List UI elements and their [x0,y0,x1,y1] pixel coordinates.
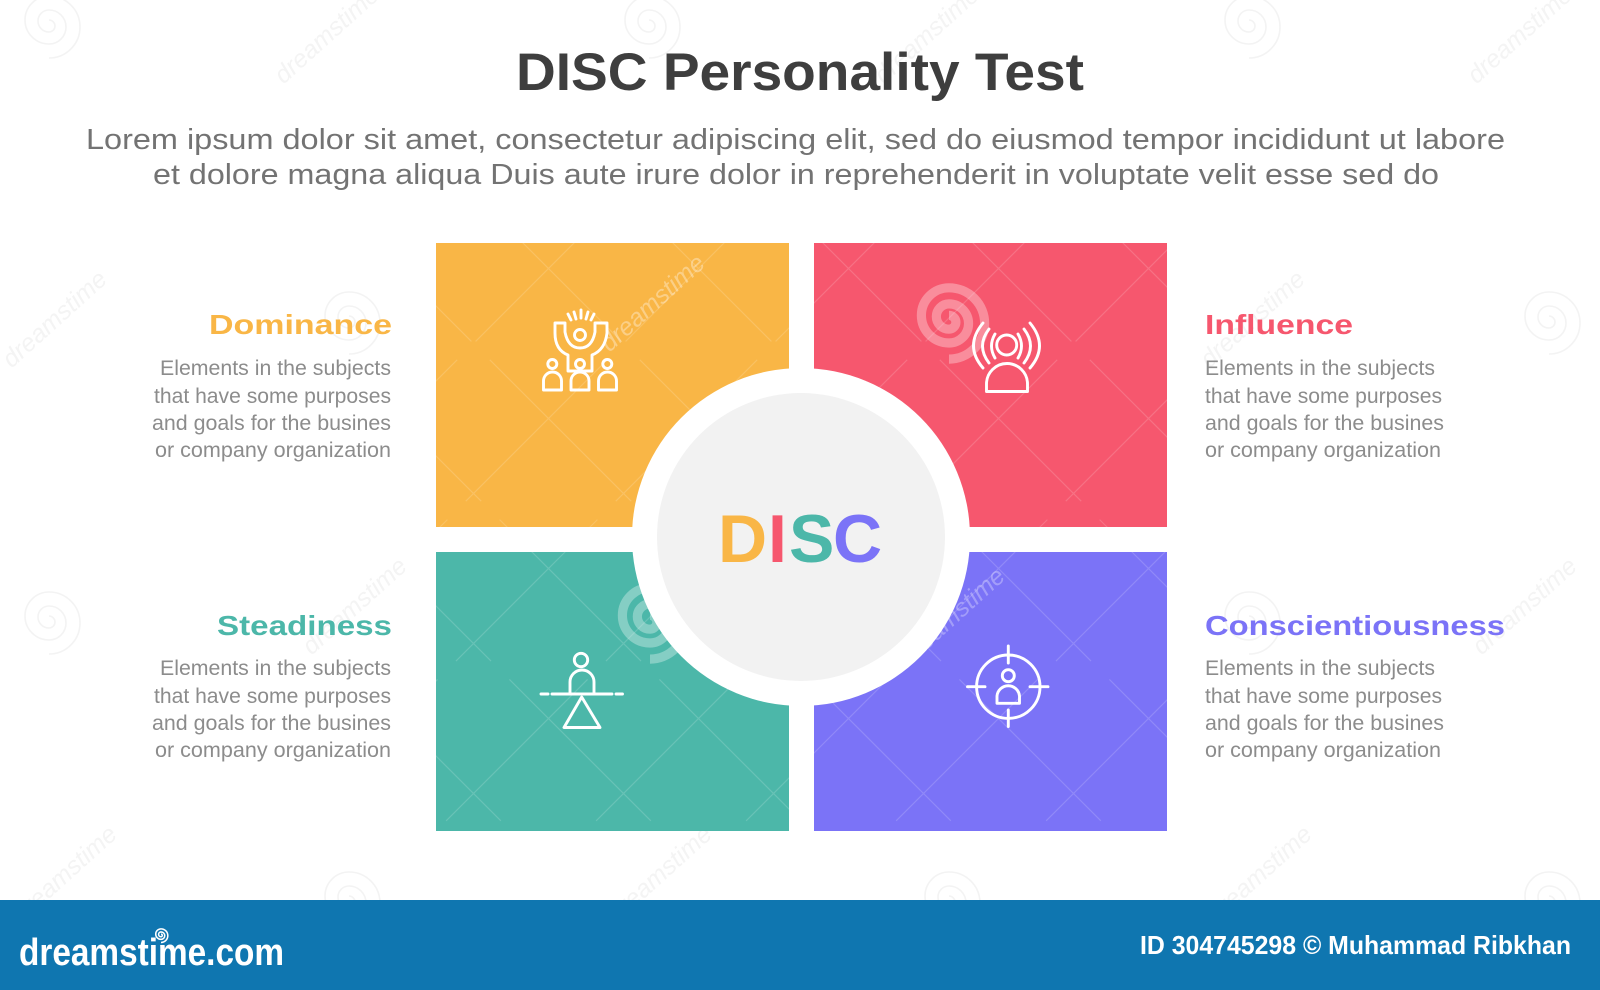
footer banner [0,900,1600,990]
subtitle: Lorem ipsum dolor sit amet, consectetur adipiscing elit, sed do eiusmod tempor incididunt ut labore [86,124,1505,156]
centre label DISC: D [718,501,767,577]
footer logo: dreamstime.com [19,932,284,974]
text block: Steadiness description: and goals for the busines [152,712,391,735]
panel: Steadiness quadrant [436,552,789,831]
watermark spiral on red panel [921,288,985,359]
text block: Conscientiousness description: Elements in the subjects [1205,657,1435,680]
text block: Steadiness description: Elements in the subjects [160,657,391,680]
watermark on white background: dreamstime [1195,265,1311,373]
heading: Dominance: Dominance [209,309,392,340]
text block: Conscientiousness description: and goals for the busines [1205,712,1444,735]
centre label DISC: I [768,501,787,577]
icon: influence broadcasting person [974,323,1040,392]
text block: Dominance description: or company organization [155,439,391,462]
icon: steadiness balance person [541,653,622,728]
text block: Influence description: that have some purposes [1205,385,1442,408]
text block: Conscientiousness description: or company organization [1205,739,1441,762]
title: DISC Personality Test [516,43,1084,102]
text block: Influence description [1205,357,1444,462]
watermark on white background: dreamstime [1202,820,1318,928]
watermark on white background: dreamstime [297,552,413,660]
watermark on white background: dreamstime [7,820,123,928]
icon: dominance crowd with raised leader [544,310,616,390]
watermark on white background: dreamstime [602,820,718,928]
watermark spiral on teal panel [622,588,686,659]
text block: Dominance description: and goals for the busines [152,412,391,435]
label: Steadiness [152,610,392,762]
label: Conscientiousness [1205,610,1505,762]
icon: conscientiousness target person [968,646,1048,726]
text block: Conscientiousness description: that have some purposes [1205,685,1442,708]
subtitle [86,124,1505,191]
panel: Conscientiousness quadrant [814,552,1167,831]
centre label DISC: C [833,501,882,577]
watermark on white background: dreamstime [0,265,113,373]
centre circle [657,393,945,681]
text block: Dominance description: Elements in the subjects [160,357,391,380]
text block: Steadiness description: that have some purposes [154,685,391,708]
heading: Influence: Influence [1205,309,1353,340]
subtitle: et dolore magna aliqua Duis aute irure dolor in reprehenderit in voluptate velit esse sed do [153,159,1439,191]
label: Influence [1205,309,1444,462]
centre ring [632,368,970,706]
panel: Influence quadrant [814,243,1167,527]
text block: Influence description: and goals for the busines [1205,412,1444,435]
watermark text on purple panel: dreamstime [895,562,1011,670]
panel: Dominance quadrant [436,243,789,527]
label: Dominance [152,309,392,462]
text block: Conscientiousness description [1205,657,1444,762]
watermark over panels: dreamstime [595,249,711,357]
heading: Steadiness: Steadiness [217,610,392,641]
text block: Steadiness description: or company organization [155,739,391,762]
text block: Steadiness description [152,657,391,762]
watermark on white background: dreamstime [1467,552,1583,660]
centre label DISC: S [789,501,834,577]
text block: Dominance description: that have some purposes [154,385,391,408]
heading: Conscientiousness: Conscientiousness [1205,610,1505,641]
footer credit: ID 304745298 © Muhammad Ribkhan [1140,930,1571,960]
text block: Influence description: Elements in the subjects [1205,357,1435,380]
text block: Influence description: or company organization [1205,439,1441,462]
text block: Dominance description [152,357,391,462]
